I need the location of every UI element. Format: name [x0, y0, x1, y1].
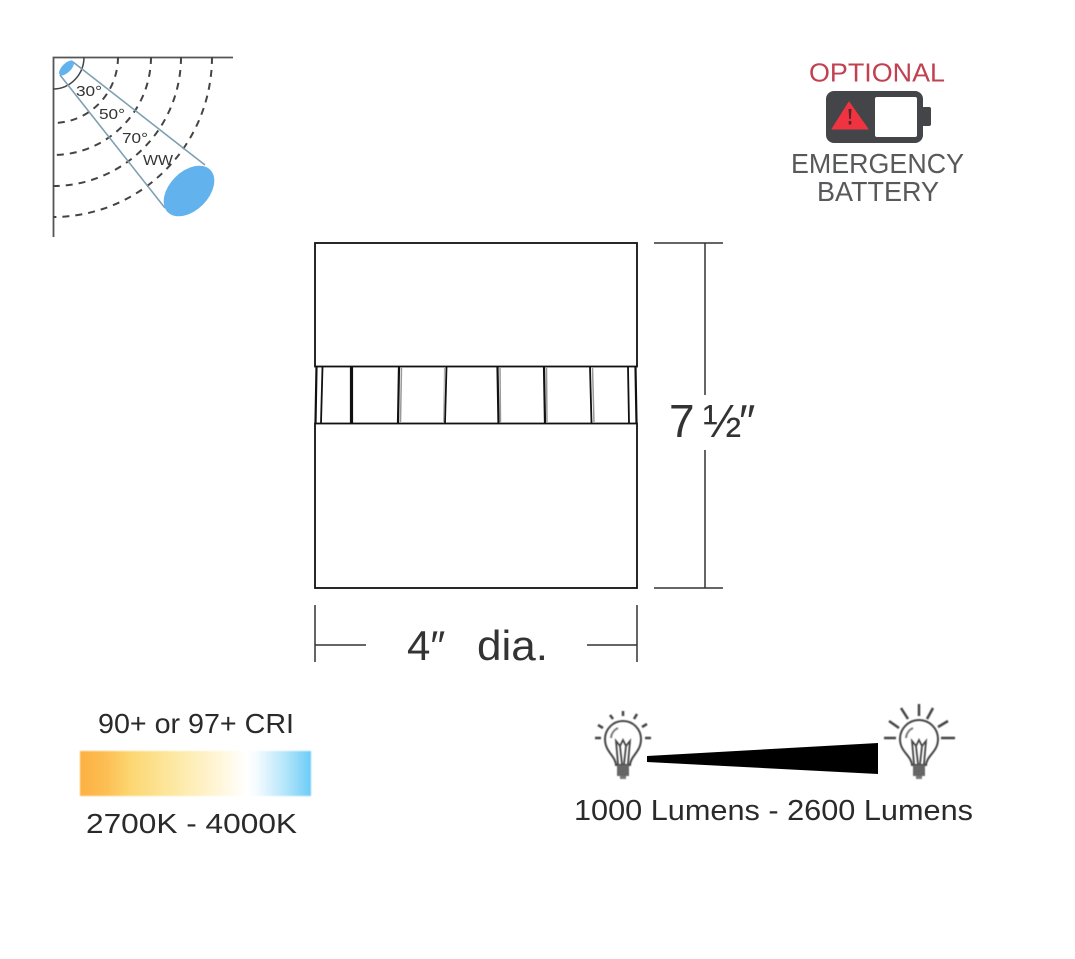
width dimension: [315, 605, 637, 669]
icon: beam angle diagram: [53, 57, 233, 237]
angle labels: 70°: [122, 130, 148, 147]
colour gradient bar: [80, 751, 311, 796]
height dimension: [654, 243, 755, 588]
angle labels: 50°: [99, 106, 125, 123]
angle arc: [53, 57, 84, 89]
fixture bottom cylinder: [315, 424, 637, 588]
emergency battery label: BATTERY: [817, 176, 939, 207]
optional label: OPTIONAL: [809, 58, 945, 88]
light cone: [60, 62, 205, 208]
battery empty cell: [875, 97, 917, 137]
height label: ½: [703, 395, 741, 447]
CRI label: 90+ or 97+ CRI: [98, 708, 294, 739]
warning triangle: [832, 102, 868, 129]
height label: 7: [669, 395, 695, 447]
emergency battery label: EMERGENCY: [791, 148, 964, 179]
battery terminal: [922, 107, 931, 126]
fixture drawing: [315, 243, 637, 588]
angle labels: 30°: [76, 83, 102, 100]
emergency battery label: [791, 148, 964, 207]
fixture top cylinder: [315, 243, 637, 366]
distance arcs: [53, 57, 212, 217]
angle labels: WW: [143, 152, 174, 169]
lumens scale: [574, 704, 973, 827]
light slot band: [316, 367, 636, 423]
beam end: [154, 156, 224, 226]
beam axes: [54, 58, 233, 237]
height label: ″: [739, 395, 755, 447]
angle labels: [76, 83, 174, 169]
beam source: [57, 58, 76, 78]
icon: optional emergency battery: [791, 58, 964, 207]
colour temperature range: 2700K - 4000K: [86, 808, 297, 839]
lumens label: 1000 Lumens - 2600 Lumens: [574, 795, 973, 827]
brightness wedge: [647, 743, 878, 774]
warning mark: [848, 109, 852, 124]
width dimension lines: [315, 605, 637, 662]
height dimension lines: [654, 243, 723, 588]
icon: bright bulb: [884, 704, 955, 779]
width label: dia.: [477, 622, 548, 669]
width label: 4″: [407, 622, 445, 669]
icon: dim bulb: [595, 711, 651, 779]
colour temperature legend: [80, 708, 311, 839]
battery body: [826, 91, 923, 143]
